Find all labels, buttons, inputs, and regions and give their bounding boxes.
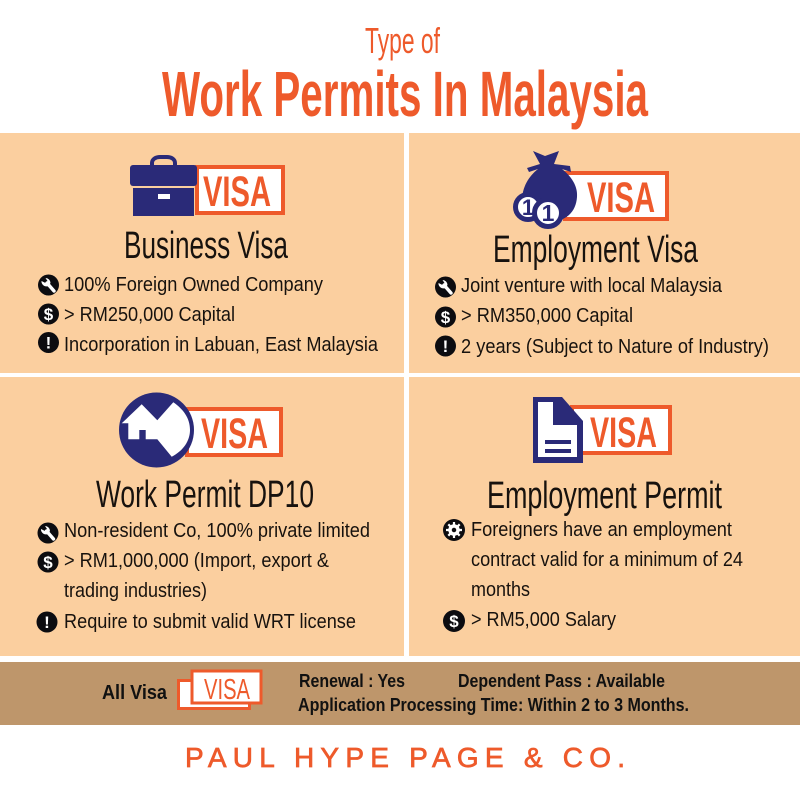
text: license: Require to submit valid WRT license [64,611,356,633]
icon: stacked visa cards [178,671,261,708]
icon: exclamation [435,336,456,356]
icon: dollar: $ [449,612,459,631]
icon: dollar: $ [43,553,53,572]
icon: document [533,397,583,463]
text: capital: > RM350,000 Capital [461,305,633,327]
heading: Work Permit DP10 [96,474,314,516]
panel: employment permit [409,377,800,656]
panel: work permit dp10 [0,377,404,656]
text: employment contract: contract valid for a minimum of 24 [471,549,743,571]
icon: dollar: $ [441,308,451,327]
visa badge: VISA [587,174,655,222]
icon: exclamation [36,612,58,632]
text: incorporation: Incorporation in Labuan, East Malaysia [64,334,379,356]
icon: exclamation [38,332,59,353]
icon: wrench [38,522,58,544]
text: duration: 2 years (Subject to Nature of Industry) [461,336,769,358]
text: capital [64,550,330,602]
text: renewal: Renewal : Yes [299,671,405,691]
panel: employment visa [409,133,800,373]
icon: house in circle [119,392,194,468]
text: capital: > RM1,000,000 (Import, export & [64,550,330,572]
title [162,20,648,130]
footer: company name: PAUL HYPE PAGE & CO. [185,742,625,773]
icon: dollar [435,306,456,328]
visa badge: VISA [590,409,657,457]
icon: dollar [38,552,58,572]
icon: money bag with coins: 1 [542,200,555,226]
label: all visa: All Visa [102,682,168,704]
visa badge [565,173,667,222]
icon: exclamation: ! [46,334,51,352]
icon: gear [443,519,465,541]
icon: dollar [443,610,465,632]
text: processing time: Application Processing Time: Within 2 to 3 Months. [298,695,689,715]
band: all visa summary [0,662,800,725]
visa badge [187,409,281,458]
text: capital: > RM250,000 Capital [64,304,235,326]
icon: briefcase [130,157,197,216]
icon: dollar [38,304,59,324]
visa badge [572,407,670,457]
icon: money bag with coins: 1 [522,195,534,220]
text: employment contract: months [471,579,530,601]
icon: wrench [435,276,456,298]
text: ownership: 100% Foreign Owned Company [64,274,323,296]
visa badge: VISA [201,410,268,458]
text: salary: > RM5,000 Salary [471,609,616,631]
text: dependent pass: Dependent Pass : Available [458,671,665,691]
panel: business visa [0,133,404,373]
heading: Business Visa [124,225,289,267]
icon: wrench [38,274,59,296]
visa badge: VISA [203,168,271,216]
icon: money bag with coins [516,151,577,226]
text: employment contract [471,519,743,601]
text: employment contract: Foreigners have an employment [471,519,732,541]
text: company type: Non-resident Co, 100% private limited [64,520,370,542]
icon: exclamation: ! [44,613,50,632]
text: joint venture: Joint venture with local Malaysia [461,275,723,297]
icon: stacked visa cards: VISA [204,674,250,706]
heading: Employment Visa [493,229,699,271]
icon: dollar: $ [44,305,54,324]
icon: exclamation: ! [443,337,448,356]
title: Type of [365,20,441,61]
text: capital: trading industries) [64,580,207,602]
